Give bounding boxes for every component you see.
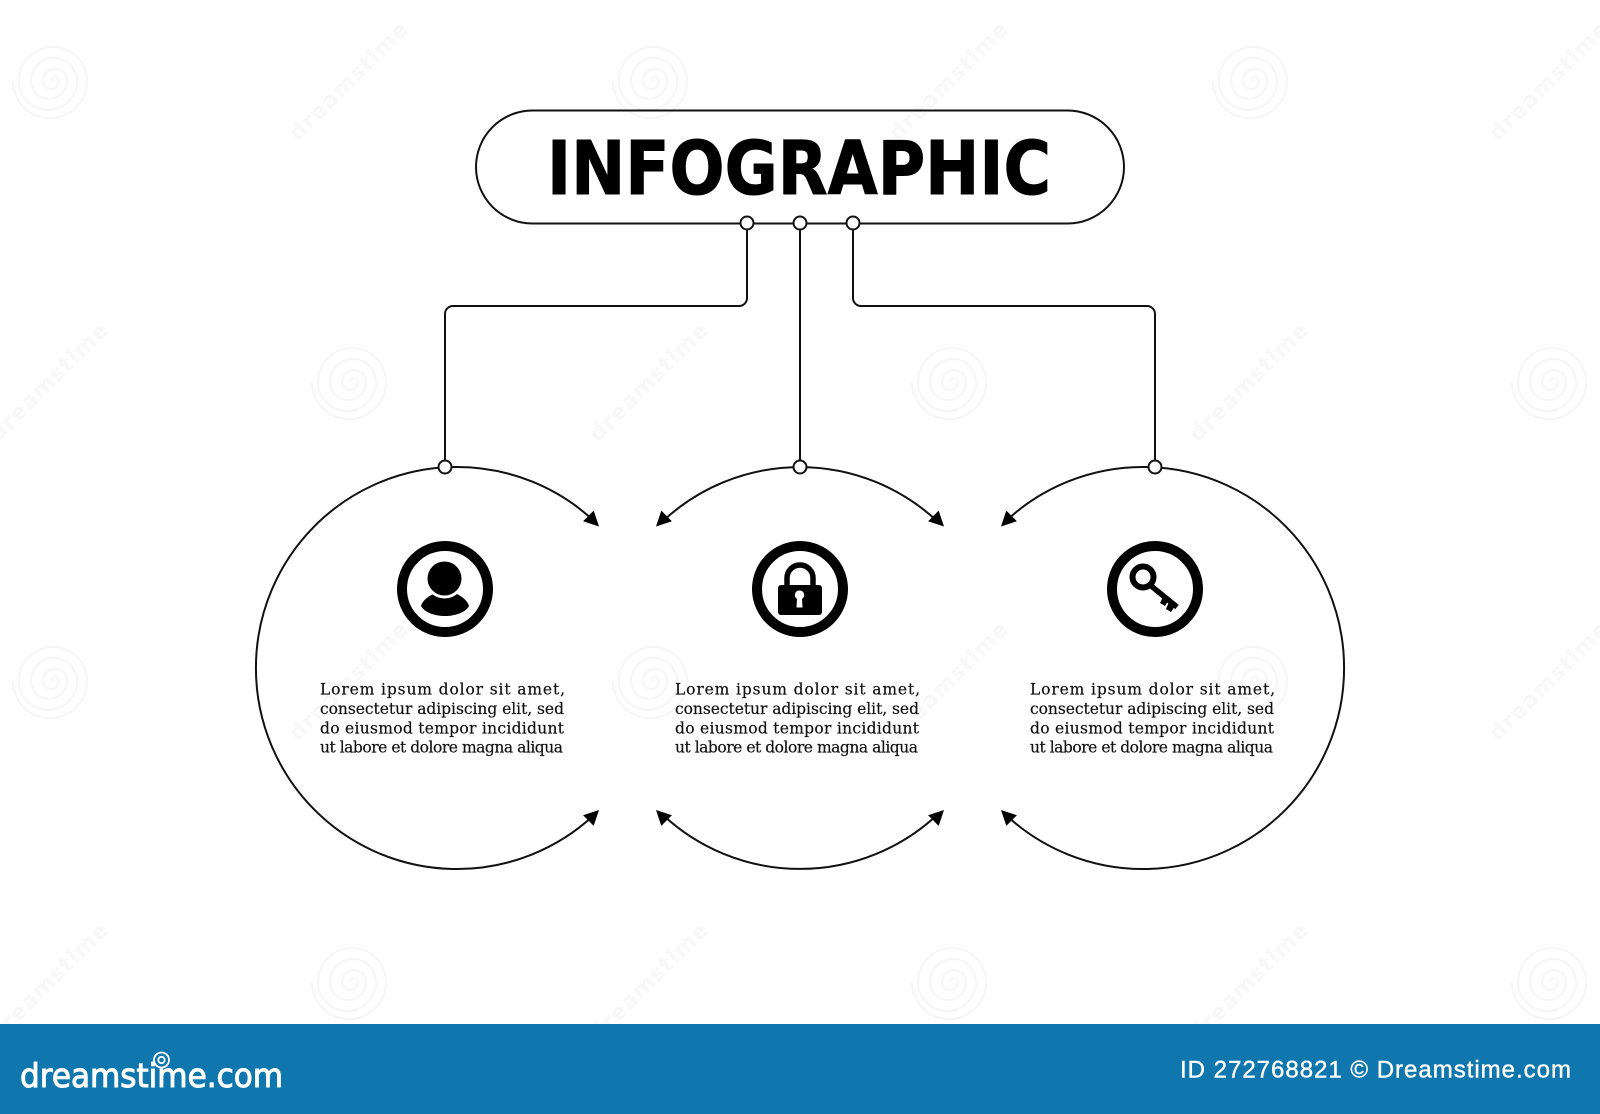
watermarks: dreamstime <box>1185 918 1314 1047</box>
title pill <box>476 110 1124 224</box>
watermarks: dreamstime <box>285 617 414 746</box>
arc: left circle <box>256 467 604 869</box>
text block: middle: do eiusmod tempor incididunt <box>675 719 920 737</box>
connector nodes <box>438 216 1162 474</box>
arc: right circle <box>996 467 1344 869</box>
text block: middle: ut labore et dolore magna aliqua <box>675 738 918 756</box>
watermarks: dreamstime <box>585 918 714 1047</box>
text block: right: do eiusmod tempor incididunt <box>1030 719 1275 737</box>
arrow: middle bottom right <box>928 805 949 826</box>
text block: middle: consectetur adipiscing elit, sed <box>675 700 919 718</box>
arrow: right circle top <box>996 511 1017 532</box>
arc: middle circle bottom <box>651 805 949 869</box>
text block: left: ut labore et dolore magna aliqua <box>320 738 563 756</box>
text block: left <box>320 680 565 756</box>
arc: middle circle top <box>651 467 949 532</box>
arrow: middle bottom left <box>651 805 672 826</box>
icon: key <box>1112 546 1198 632</box>
footer logo: dreamstime.com <box>20 1056 283 1095</box>
arrow: middle top right <box>928 511 949 532</box>
text block: middle <box>675 680 920 756</box>
icon: logo spiral <box>154 1052 169 1068</box>
text block: right: ut labore et dolore magna aliqua <box>1030 738 1273 756</box>
watermarks: dreamstime <box>1185 318 1314 447</box>
watermarks: dreamstime <box>585 318 714 447</box>
text block: right: Lorem ipsum dolor sit amet, <box>1030 680 1275 698</box>
connector: left <box>445 223 747 467</box>
watermarks: dreamstime <box>885 17 1014 146</box>
text block: left: consectetur adipiscing elit, sed <box>320 700 564 718</box>
footer image id: ID 272768821 © Dreamstime.com <box>1180 1056 1571 1084</box>
text block: middle: Lorem ipsum dolor sit amet, <box>675 680 920 698</box>
text block: right: consectetur adipiscing elit, sed <box>1030 700 1274 718</box>
icon: person <box>402 546 488 632</box>
footer bar <box>0 1024 1600 1114</box>
arrow: middle top left <box>651 511 672 532</box>
arrow: right circle bottom <box>996 805 1017 826</box>
title: INFOGRAPHIC <box>547 126 1051 212</box>
watermarks: dreamstime <box>885 617 1014 746</box>
text block: left: Lorem ipsum dolor sit amet, <box>320 680 565 698</box>
arrow: left circle bottom <box>583 805 604 826</box>
text block: left: do eiusmod tempor incididunt <box>320 719 565 737</box>
icon: padlock <box>757 546 843 632</box>
connector: right <box>853 223 1155 467</box>
text block: right <box>1030 680 1275 756</box>
connector: middle <box>799 223 801 467</box>
watermarks: dreamstime <box>285 17 414 146</box>
arrow: left circle top <box>583 511 604 532</box>
